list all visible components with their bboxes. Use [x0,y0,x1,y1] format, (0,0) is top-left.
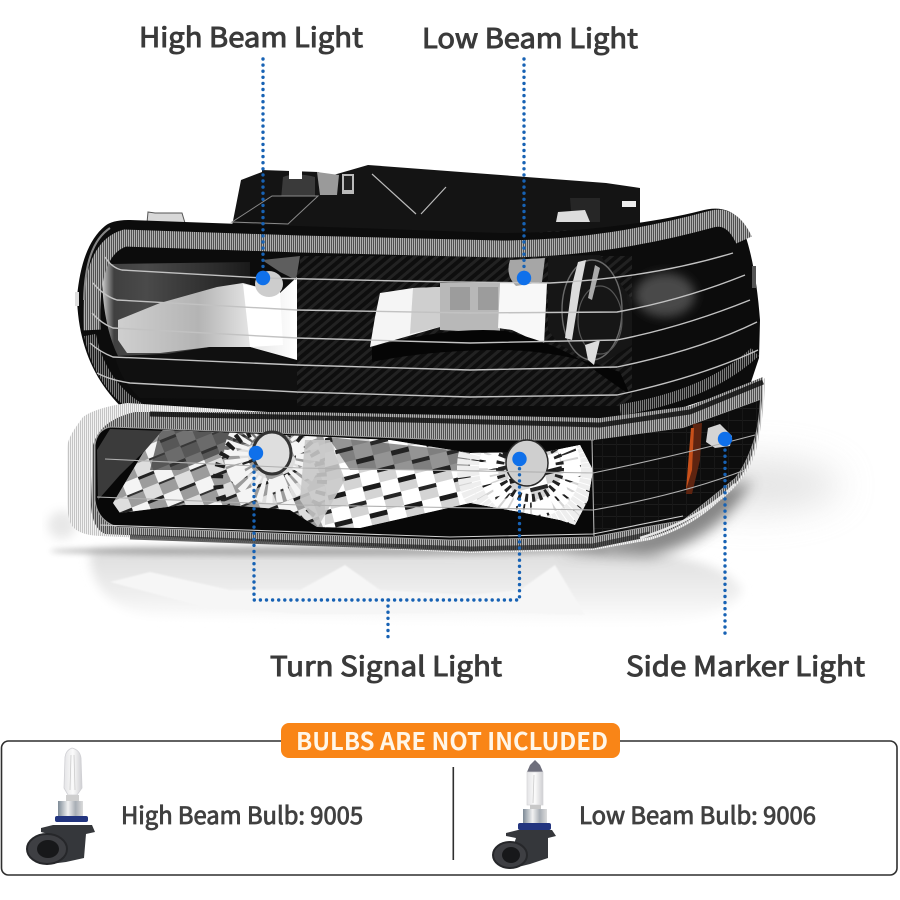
side marker socket [706,424,732,448]
right marker dot [512,452,527,466]
high beam reflector highlight [243,284,283,347]
dotted leader [723,444,727,637]
lens lines [90,253,758,397]
icon: low beam bulb 9006 [493,760,556,868]
dotted leaders [254,460,520,637]
callout: turn signal light [249,446,527,684]
left marker dot [249,446,263,460]
label: low beam bulb: Low Beam Bulb: 9006 [579,796,816,831]
dotted leader [522,59,526,276]
lens lines [97,435,755,537]
lens interior left shade [102,258,250,356]
dotted leader [261,59,265,276]
silver outer housing [67,378,765,553]
top chrome bezel [92,218,744,330]
lower right chrome band [620,352,755,410]
bezel lower shading [130,534,650,549]
heading: High Beam Light [139,16,363,55]
heading: Side Marker Light [626,645,865,684]
left lens grey shade [97,429,165,500]
bracket details [147,170,636,224]
bumper lower chrome glint [640,484,735,538]
divider [452,767,454,860]
marker dot [256,271,270,285]
heading: Turn Signal Light [270,645,502,684]
marker dot [718,432,732,446]
amber marker lens [686,423,702,494]
dark inner bezel [91,377,763,551]
left bulb socket [253,432,291,474]
black lens [95,400,760,540]
heading: Low Beam Light [422,17,638,56]
right clip [752,266,756,288]
bezel shading band [150,382,763,425]
housing body [77,209,760,425]
left white edge clip [75,292,79,306]
high beam reflector [118,277,297,360]
callout: side marker light [626,432,865,684]
low beam bulb socket [508,258,545,286]
label: high beam bulb: High Beam Bulb: 9005 [121,796,363,831]
top inner dark shade [110,254,300,268]
right grid panel [594,400,760,535]
bumper signal light [67,377,765,553]
marker dot [517,271,531,285]
ground shadow and reflection [48,459,840,625]
callout: high beam light [139,16,363,285]
low beam reflector [370,283,630,395]
carbon centre panel [297,256,632,406]
right bulb socket [506,440,548,486]
banner: BULBS ARE NOT INCLUDED [296,722,608,757]
icon: high beam bulb 9005 [27,748,95,864]
lower left bezel [90,335,145,412]
lower dark lens section [115,347,297,400]
right arc reflector [548,255,632,365]
left bezel edge [84,228,110,300]
high beam bulb socket [255,271,283,297]
lens right glow [635,273,695,317]
high beam socket details [262,256,300,280]
panel: bulbs [2,722,897,875]
rear mounting bracket [232,165,640,235]
reflector faceted area [113,430,592,528]
callout: low beam light [422,17,638,285]
panel border [2,741,897,875]
headlight assembly [75,165,760,425]
amber highlight [686,428,694,490]
